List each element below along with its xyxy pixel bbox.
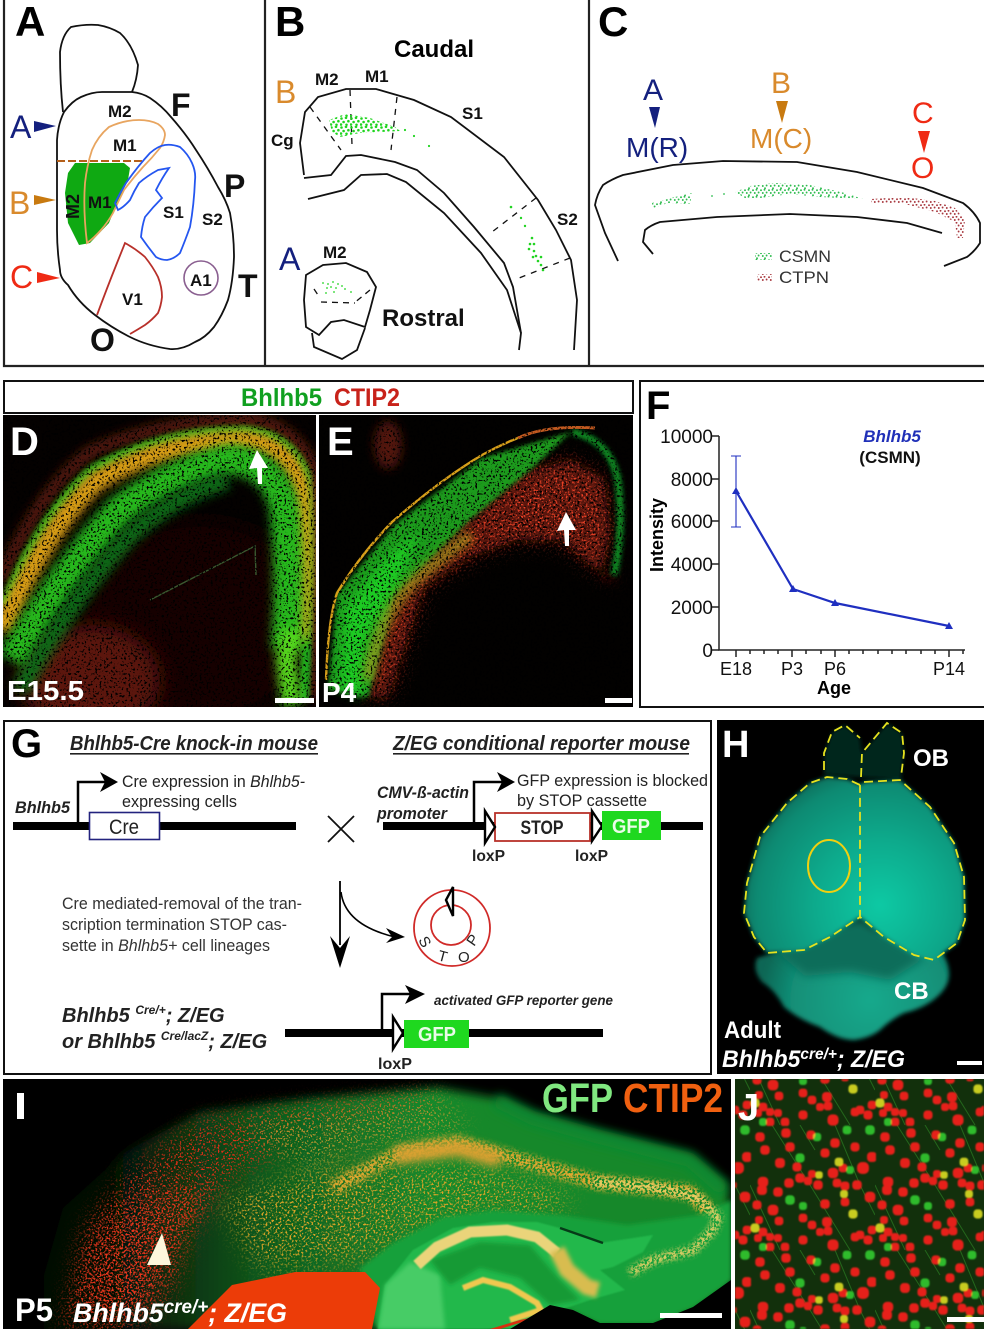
rostral dots bbox=[322, 281, 352, 294]
legend: CSMN bbox=[779, 247, 831, 266]
x tick labels: P3 bbox=[781, 659, 803, 679]
genotype text bbox=[62, 1003, 267, 1053]
area labels: M2 bbox=[63, 194, 83, 219]
area labels: S2 bbox=[202, 210, 223, 229]
reporter construct: promoter bbox=[376, 804, 448, 823]
GFP CTIP2 heading bbox=[543, 1084, 722, 1112]
layer band near hippocampus bbox=[593, 1182, 718, 1273]
legend: (CSMN) bbox=[859, 448, 921, 467]
olfactory bulb outline bbox=[60, 25, 138, 112]
compass labels: P bbox=[224, 168, 245, 204]
cross symbol bbox=[328, 816, 354, 842]
GFP CTIP2 heading: GFP bbox=[542, 1075, 613, 1121]
letter F: F bbox=[646, 384, 670, 428]
y axis title: Intensity bbox=[647, 498, 667, 572]
letter E: E bbox=[327, 420, 354, 464]
age and genotype bbox=[722, 1020, 904, 1071]
area labels bbox=[63, 102, 223, 309]
section arrow B: B bbox=[9, 185, 30, 221]
section arrow C bbox=[10, 259, 60, 295]
area labels: M1 bbox=[113, 136, 137, 155]
striatum red area bbox=[188, 1272, 380, 1329]
labels for caudal section: S2 bbox=[557, 210, 578, 229]
cortex outline bbox=[57, 92, 234, 349]
CTPN dots bbox=[871, 197, 965, 238]
lower brain base bbox=[360, 1200, 731, 1329]
rostral labels: M2 bbox=[323, 243, 347, 262]
rostral labels bbox=[323, 243, 465, 332]
excised STOP circle bbox=[414, 887, 490, 966]
area labels: M2 bbox=[108, 102, 132, 121]
y tick labels bbox=[660, 427, 713, 662]
labels for caudal section: M2 bbox=[315, 70, 339, 89]
age and genotype: P5 bbox=[15, 1292, 53, 1328]
removal description bbox=[62, 894, 302, 955]
letter D: D bbox=[10, 420, 39, 464]
compass labels: T bbox=[238, 268, 258, 304]
removal description: Cre mediated-removal of the tran- bbox=[62, 894, 302, 913]
scale bar bbox=[660, 1313, 722, 1318]
reporter construct: by STOP cassette bbox=[517, 791, 647, 810]
age and genotype: cre/+ bbox=[800, 1046, 837, 1063]
reporter construct: CMV-ß-actin bbox=[377, 783, 469, 802]
section arrow A bbox=[10, 109, 56, 145]
marker A bbox=[626, 74, 688, 163]
arrowhead bbox=[147, 1233, 171, 1265]
compass labels: F bbox=[171, 87, 191, 123]
letter B orange: B bbox=[275, 74, 296, 110]
Bhlhb5-Cre construct: Bhlhb5 bbox=[15, 798, 71, 817]
rostral dashes bbox=[314, 289, 370, 304]
Bhlhb5-Cre construct: Cre expression in Bhlhb5- bbox=[122, 772, 305, 791]
excised STOP circle: P bbox=[463, 931, 483, 949]
genotype text: ; Z/EG bbox=[208, 1031, 267, 1053]
excised STOP circle: S bbox=[415, 934, 434, 951]
x axis title: Age bbox=[817, 678, 851, 698]
area labels: S1 bbox=[163, 203, 184, 222]
panel I: P5 sagittal section bbox=[3, 1075, 731, 1329]
scale bar bbox=[947, 1317, 984, 1322]
rostral labels: Rostral bbox=[382, 305, 465, 332]
heading: Bhlhb5 CTIP2 bbox=[4, 381, 633, 413]
area labels: A1 bbox=[190, 271, 212, 290]
panel F: intensity line chart bbox=[640, 381, 984, 707]
rostral section outline bbox=[304, 263, 376, 359]
OB label: OB bbox=[913, 745, 949, 772]
reporter construct: GFP bbox=[612, 816, 650, 838]
removal description: sette in Bhlhb5+ cell lineages bbox=[62, 936, 270, 955]
axes bbox=[712, 436, 965, 657]
activated construct bbox=[285, 985, 613, 1073]
Bhlhb5-Cre construct: expressing cells bbox=[122, 792, 237, 811]
legend bbox=[755, 247, 831, 287]
area labels: M1 bbox=[88, 193, 112, 212]
y tick labels: 0 bbox=[702, 641, 713, 662]
CSMN dots motor cortex bbox=[329, 114, 430, 147]
heading: Bhlhb5 CTIP2: CTIP2 bbox=[334, 384, 400, 412]
y tick labels: 6000 bbox=[671, 512, 713, 533]
panel C: section with CSMN and CTPN bbox=[595, 0, 980, 287]
labels for caudal section: Cg bbox=[271, 131, 294, 150]
rostro-caudal dashed line bbox=[57, 160, 143, 162]
legend: CTPN bbox=[779, 268, 829, 287]
marker C bbox=[911, 97, 934, 185]
arrow bbox=[557, 512, 576, 546]
age and genotype bbox=[17, 1298, 286, 1326]
letter A navy: A bbox=[279, 241, 301, 277]
y tick labels: 2000 bbox=[671, 598, 713, 619]
genotype text: or Bhlhb5 bbox=[62, 1031, 155, 1053]
age and genotype: Bhlhb5 bbox=[722, 1046, 803, 1073]
letter I bbox=[17, 1093, 24, 1119]
A1 circle bbox=[184, 261, 218, 295]
arrow bbox=[249, 450, 268, 484]
scale bar bbox=[275, 698, 314, 703]
GFP CTIP2 heading: CTIP2 bbox=[623, 1075, 723, 1121]
panel A: cortical map bbox=[9, 0, 258, 358]
panel: top schematic frame bbox=[4, 0, 984, 366]
y tick labels: 4000 bbox=[671, 555, 713, 576]
compass labels bbox=[90, 87, 258, 358]
x tick labels: P6 bbox=[824, 659, 846, 679]
age and genotype: ; Z/EG bbox=[837, 1046, 905, 1073]
panel D: E15.5 micrograph bbox=[3, 415, 316, 707]
section arrow A: A bbox=[10, 109, 32, 145]
age label: E15.5 bbox=[7, 675, 84, 706]
age and genotype: Adult bbox=[724, 1017, 781, 1044]
marker B: M(C) bbox=[750, 123, 812, 154]
genotype text: ; Z/EG bbox=[166, 1005, 225, 1027]
age and genotype: Bhlhb5 bbox=[73, 1298, 164, 1328]
heading: Bhlhb5 CTIP2: Bhlhb5 bbox=[241, 384, 322, 412]
section arrow B bbox=[9, 185, 56, 221]
activated construct: loxP bbox=[378, 1056, 412, 1073]
letter J: J bbox=[738, 1087, 759, 1129]
background below brain bbox=[510, 1280, 731, 1329]
marker A: A bbox=[643, 74, 663, 107]
genotype text: Cre/lacZ bbox=[161, 1029, 209, 1043]
letter G: G bbox=[11, 722, 42, 766]
labels for caudal section: S1 bbox=[462, 104, 483, 123]
age and genotype: cre/+ bbox=[164, 1297, 208, 1318]
y tick labels: 8000 bbox=[671, 470, 713, 491]
hippocampus bbox=[378, 1222, 653, 1329]
marker A: M(R) bbox=[626, 132, 688, 163]
activated construct: GFP bbox=[418, 1024, 456, 1046]
x tick labels: P14 bbox=[933, 659, 965, 679]
labels for caudal section bbox=[271, 67, 578, 229]
removal description: scription termination STOP cas- bbox=[62, 915, 287, 934]
legend bbox=[859, 427, 921, 467]
panel J: high magnification bbox=[735, 1079, 984, 1329]
CB label: CB bbox=[894, 978, 929, 1005]
section arrow C: C bbox=[10, 259, 33, 295]
age and genotype: ; Z/EG bbox=[208, 1298, 287, 1328]
yellow dashed outline bbox=[744, 723, 965, 960]
motor cortex green area bbox=[65, 163, 130, 245]
x tick labels bbox=[720, 659, 965, 679]
labels for caudal section: M1 bbox=[365, 67, 389, 86]
panel G: genetic strategy bbox=[4, 721, 711, 1074]
reporter construct: loxP bbox=[472, 848, 505, 865]
M1 orange outline bbox=[84, 120, 165, 243]
texture overlay bbox=[319, 415, 633, 707]
section outline bbox=[595, 161, 980, 266]
texture overlay bbox=[3, 415, 316, 707]
flow arrows bbox=[330, 881, 405, 968]
genotype text: Bhlhb5 bbox=[62, 1005, 130, 1027]
compass labels: O bbox=[90, 322, 115, 358]
reporter construct bbox=[376, 771, 708, 865]
excised STOP circle: T bbox=[436, 947, 449, 966]
marker B bbox=[750, 67, 812, 154]
reporter construct: loxP bbox=[575, 848, 608, 865]
V1 red outline bbox=[97, 243, 162, 334]
scale bar bbox=[605, 698, 632, 703]
x tick labels: E18 bbox=[720, 659, 752, 679]
genotype text: Cre/+ bbox=[135, 1003, 166, 1017]
marker C: C bbox=[912, 97, 934, 130]
excised STOP circle: O bbox=[458, 949, 470, 966]
area labels: V1 bbox=[122, 290, 143, 309]
heading: knock-in: Bhlhb5-Cre knock-in mouse bbox=[70, 733, 318, 755]
M1 yellow circle bbox=[808, 840, 850, 892]
panel E: P4 micrograph bbox=[319, 415, 633, 708]
marker B: B bbox=[771, 67, 791, 100]
y tick labels: 10000 bbox=[660, 427, 713, 448]
brain fluorescence bbox=[744, 723, 965, 1040]
caudal section outline bbox=[300, 89, 577, 350]
reporter construct: GFP expression is blocked bbox=[517, 771, 708, 790]
data line bbox=[731, 456, 953, 629]
marker C: O bbox=[911, 152, 934, 185]
panel H: adult brain bbox=[717, 720, 984, 1074]
legend: Bhlhb5 bbox=[863, 427, 921, 446]
activated construct: activated GFP reporter gene bbox=[434, 993, 613, 1008]
age label: P4 bbox=[322, 677, 357, 708]
panel B: coronal sections bbox=[271, 0, 578, 359]
Bhlhb5-Cre construct: Cre bbox=[109, 816, 139, 839]
letter H: H bbox=[722, 724, 749, 766]
CSMN dots bbox=[652, 183, 863, 208]
Bhlhb5-Cre construct bbox=[13, 772, 305, 840]
scale bar bbox=[957, 1061, 982, 1065]
heading: reporter: Z/EG conditional reporter mouse bbox=[392, 733, 690, 755]
reporter construct: STOP bbox=[520, 818, 564, 839]
caudal label: Caudal bbox=[394, 36, 474, 63]
cortex fluorescence bbox=[44, 1088, 731, 1329]
CSMN dots S2 bbox=[510, 206, 544, 271]
caudal area dashes bbox=[310, 90, 570, 278]
S1 blue outline bbox=[115, 145, 195, 260]
